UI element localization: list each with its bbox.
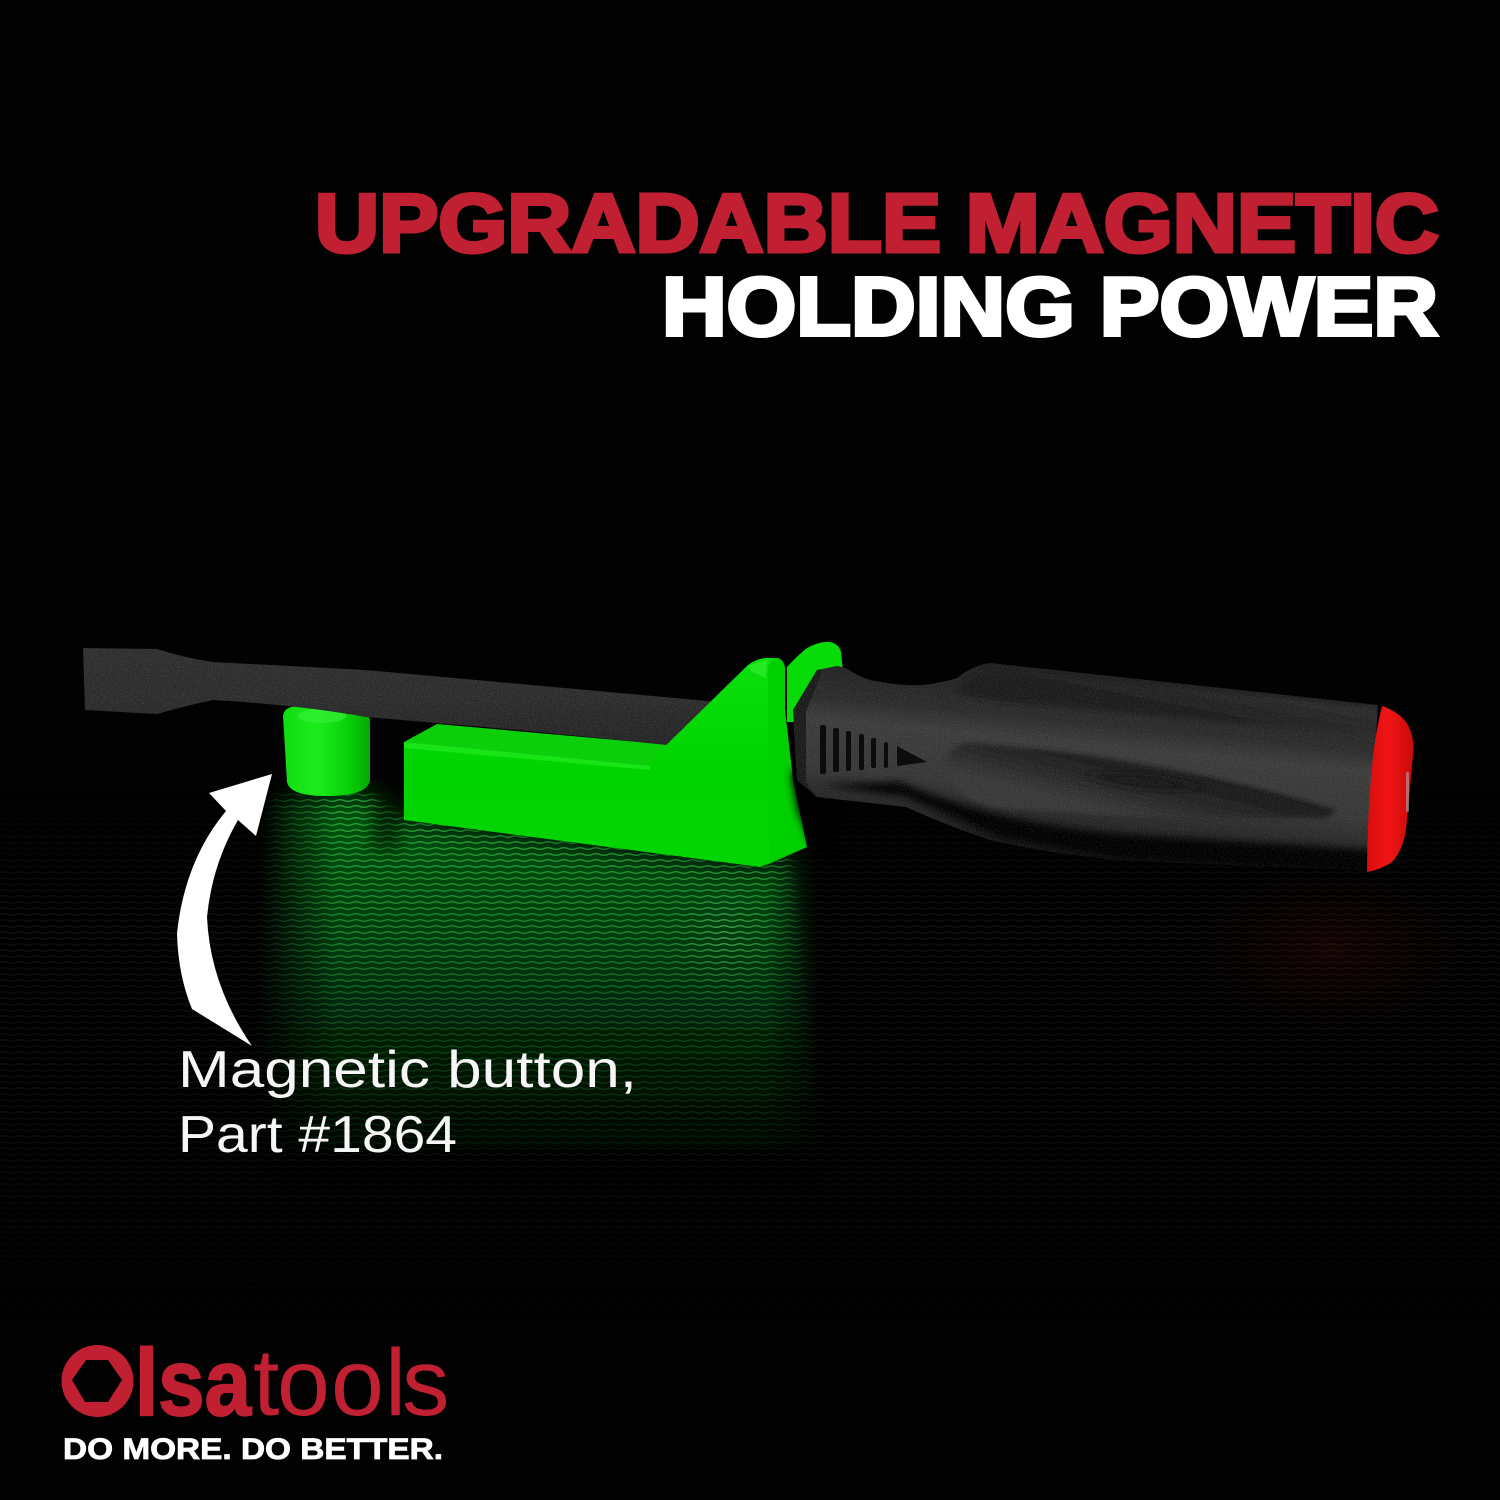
magnetic holder, back fin — [787, 642, 843, 722]
handle metal end — [1406, 772, 1409, 812]
handle grip ribs — [820, 725, 927, 774]
logo: Olsatools — [61, 1330, 449, 1466]
callout: magnetic button — [178, 1041, 637, 1164]
magnetic holder — [404, 658, 835, 867]
holder front face and upright — [404, 658, 807, 867]
holder upright side — [762, 658, 807, 867]
title line 2: HOLDING POWER — [662, 260, 1438, 353]
title — [315, 176, 1439, 353]
tagline: DO MORE. DO BETTER. — [63, 1433, 443, 1466]
holder side shadow — [790, 770, 835, 860]
title line 1: UPGRADABLE MAGNETIC — [315, 176, 1439, 270]
logo: Olsatools: tools — [253, 1330, 450, 1436]
background: dark textured surface — [0, 867, 1500, 1136]
callout: magnetic button: Magnetic button, — [178, 1041, 637, 1099]
icon: hexagon O — [61, 1345, 133, 1417]
wordmark: lsa — [135, 1330, 252, 1436]
holder top face — [404, 724, 672, 768]
handle shading and grooves — [790, 660, 1390, 875]
screwdriver handle — [790, 660, 1413, 875]
callout: magnetic button: Part #1864 — [178, 1106, 457, 1164]
handle red end cap — [1367, 706, 1413, 872]
magnetic button — [283, 706, 370, 796]
arrow pointing to magnetic button — [177, 774, 272, 1046]
screwdriver blade — [83, 648, 711, 745]
green reflection on the surface — [240, 795, 830, 1170]
